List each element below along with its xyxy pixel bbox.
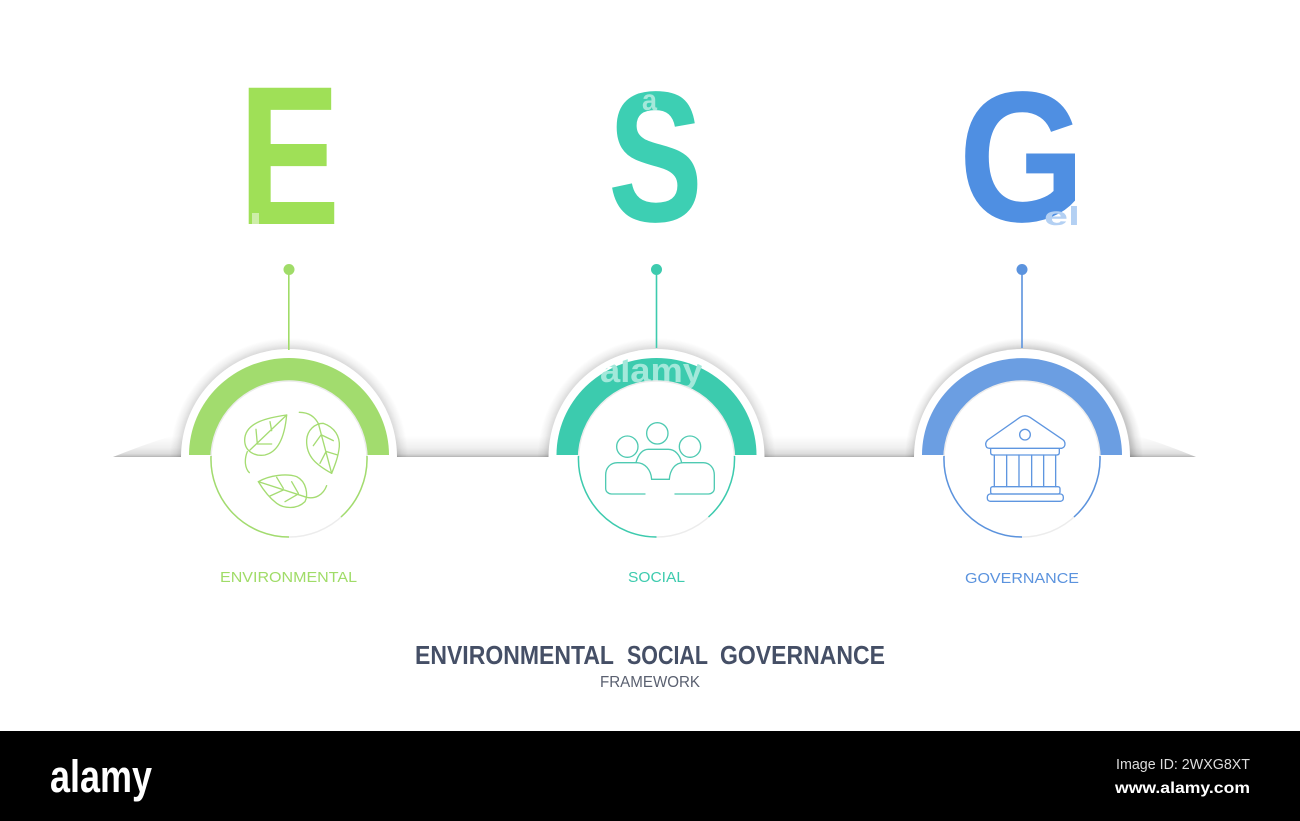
letter G: el [1044,201,1080,231]
connector: social [651,264,662,348]
icon: three people [606,423,714,494]
letter G: G [958,54,1085,261]
label: governance: GOVERNANCE [965,570,1079,587]
panel: governance [914,264,1130,587]
letter S: S [608,54,703,261]
letter E: E [238,46,340,267]
footer logo: alamy [50,751,152,802]
arch: social [548,349,764,537]
label: social: SOCIAL [628,569,685,586]
title: GOVERNANCE [720,640,885,670]
letter S: a [642,84,657,117]
label: environmental: ENVIRONMENTAL [220,569,357,586]
footer url: www.alamy.com [1114,780,1250,797]
arch: social: alamy [600,352,703,390]
title [415,640,885,670]
panel: environmental [181,264,397,586]
title: ENVIRONMENTAL [415,640,614,670]
connector: environmental [284,264,294,350]
arch shadows [174,340,1140,457]
shadowed horizontal band [113,432,1196,457]
footer bar [0,731,1300,821]
subtitle: FRAMEWORK [600,674,701,691]
footer image id: Image ID: 2WXG8XT [1116,757,1250,773]
panel: social [548,264,764,586]
arch: environmental [181,349,397,537]
arch: governance [914,349,1130,537]
icon: government building [986,416,1065,501]
icon: three leaves [245,412,339,507]
connector: governance [1016,264,1028,348]
title: SOCIAL [627,640,708,670]
